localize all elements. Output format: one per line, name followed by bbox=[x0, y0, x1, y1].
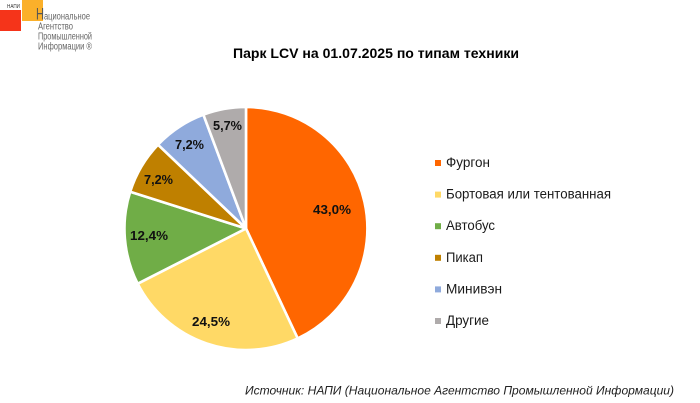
legend item: Пикап: Пикап bbox=[446, 250, 483, 265]
legend bbox=[435, 155, 611, 328]
legend item: Фургон: Фургон bbox=[446, 155, 490, 170]
pie chart bbox=[124, 107, 367, 350]
legend item: Минивэн: Минивэн bbox=[446, 281, 502, 296]
slice: Минивэн 7,2% bbox=[158, 115, 246, 228]
slice: Фургон 43,0% bbox=[246, 107, 367, 338]
logo: НАПИ: Н bbox=[36, 4, 44, 24]
data labels: 12,4% bbox=[130, 228, 168, 243]
slice: Другие 5,7% bbox=[203, 107, 246, 228]
logo: НАПИ: НАПИ bbox=[7, 4, 20, 10]
legend item: Другие: Другие bbox=[446, 313, 489, 328]
source note: Источник: НАПИ (Национальное Агентство Промышленной Информации) bbox=[245, 384, 674, 398]
title: Парк LCV на 01.07.2025 по типам техники bbox=[233, 45, 519, 61]
logo: НАПИ bbox=[0, 0, 92, 52]
data labels: 5,7% bbox=[213, 118, 242, 133]
logo: НАПИ: Информации ® bbox=[38, 40, 92, 52]
legend item: Бортовая или тентованная: Бортовая или тентованная bbox=[446, 187, 611, 202]
data labels: 43,0% bbox=[313, 202, 351, 217]
slice: Автобус 12,4% bbox=[124, 192, 246, 284]
data labels: 24,5% bbox=[192, 314, 230, 329]
slice: Пикап 7,2% bbox=[130, 145, 246, 228]
data labels bbox=[130, 118, 351, 329]
logo: НАПИ: Промышленной bbox=[38, 32, 92, 42]
logo: НАПИ: Агентство bbox=[38, 22, 73, 32]
data labels: 7,2% bbox=[175, 137, 204, 152]
slice: Бортовая или тентованная 24,5% bbox=[138, 228, 298, 350]
logo: НАПИ: ациональное bbox=[44, 12, 90, 22]
data labels: 7,2% bbox=[144, 172, 173, 187]
legend item: Автобус: Автобус bbox=[446, 218, 495, 233]
